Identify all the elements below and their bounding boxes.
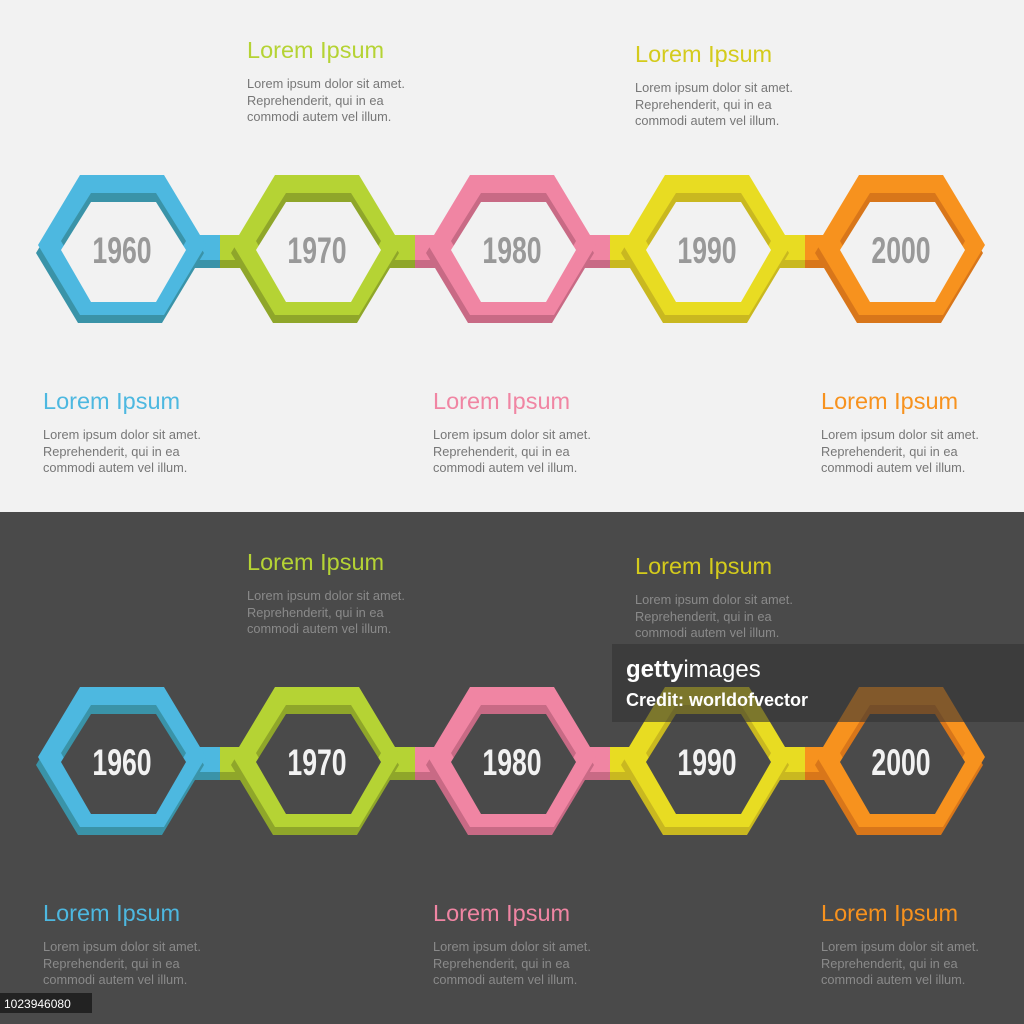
connectors [195, 235, 830, 268]
background: dark panel [0, 512, 1024, 1024]
image id label [0, 993, 92, 1013]
text block: 1970 top [247, 37, 405, 124]
text block: 1970 top dark: Lorem ipsum dolor sit amet. [247, 588, 405, 603]
text block: 1980 bottom [433, 388, 591, 475]
text block: 1960 bottom dark: Lorem Ipsum [43, 900, 180, 926]
hexagon 1960 dark [36, 687, 206, 835]
text block: 1990 top: commodi autem vel illum. [635, 113, 779, 128]
text block: 1980 bottom dark: Reprehenderit, qui in ea [433, 956, 570, 971]
text block: 1970 top dark: Reprehenderit, qui in ea [247, 605, 384, 620]
text block: 1990 top [635, 41, 793, 128]
text block: 1970 top dark: commodi autem vel illum. [247, 621, 391, 636]
hexagon 1980 dark [426, 687, 596, 835]
text block: 2000 bottom dark [821, 900, 979, 987]
text block: 1970 top dark [247, 549, 405, 636]
hexagon 1980 [426, 175, 596, 323]
text block: 1990 top: Lorem ipsum dolor sit amet. [635, 80, 793, 95]
hexagon 1970 dark: 1970 [287, 742, 347, 783]
hexagon 1980 dark: 1980 [482, 742, 542, 783]
timeline: dark [36, 687, 985, 835]
hexagon 1960: 1960 [92, 230, 152, 271]
text block: 1970 top: Lorem Ipsum [247, 37, 384, 63]
hexagon 1960 [36, 175, 206, 323]
text block: 1960 bottom: Reprehenderit, qui in ea [43, 444, 180, 459]
text block: 1960 bottom [43, 388, 201, 475]
text block: 1990 top dark: Lorem Ipsum [635, 553, 772, 579]
text block: 2000 bottom dark: Lorem ipsum dolor sit amet. [821, 939, 979, 954]
text block: 1970 top: Reprehenderit, qui in ea [247, 93, 384, 108]
text block: 1960 bottom dark: commodi autem vel illum. [43, 972, 187, 987]
hexagon 1990 dark: 1990 [677, 742, 737, 783]
hexagon 2000 dark: 2000 [871, 742, 931, 783]
text block: 2000 bottom: Reprehenderit, qui in ea [821, 444, 958, 459]
text block: 1980 bottom dark: Lorem ipsum dolor sit amet. [433, 939, 591, 954]
hexagon 2000 [815, 175, 985, 323]
text block: 1990 top dark [635, 553, 793, 640]
text block: 1960 bottom dark: Reprehenderit, qui in ea [43, 956, 180, 971]
text block: 1960 bottom: Lorem ipsum dolor sit amet. [43, 427, 201, 442]
text block: 2000 bottom dark: commodi autem vel illum. [821, 972, 965, 987]
text block: 2000 bottom: Lorem ipsum dolor sit amet. [821, 427, 979, 442]
text block: 1990 top dark: commodi autem vel illum. [635, 625, 779, 640]
hexagon 2000 dark [815, 687, 985, 835]
timeline: light [36, 175, 985, 323]
text block: 1970 top dark: Lorem Ipsum [247, 549, 384, 575]
text block: 1970 top: Lorem ipsum dolor sit amet. [247, 76, 405, 91]
text block: 1990 top dark: Lorem ipsum dolor sit amet. [635, 592, 793, 607]
text block: 1980 bottom: Lorem ipsum dolor sit amet. [433, 427, 591, 442]
text block: 2000 bottom dark: Reprehenderit, qui in ea [821, 956, 958, 971]
text block: 2000 bottom: Lorem Ipsum [821, 388, 958, 414]
text block: 1960 bottom: Lorem Ipsum [43, 388, 180, 414]
text block: 1960 bottom dark: Lorem ipsum dolor sit amet. [43, 939, 201, 954]
text block: 2000 bottom [821, 388, 979, 475]
watermark: gettyimages [626, 656, 761, 683]
hexagon 1980: 1980 [482, 230, 542, 271]
connectors dark [195, 747, 830, 780]
text block: 1980 bottom: Reprehenderit, qui in ea [433, 444, 570, 459]
text block: 1980 bottom: commodi autem vel illum. [433, 460, 577, 475]
hexagon 1990: 1990 [677, 230, 737, 271]
text block: 1980 bottom dark: commodi autem vel illum. [433, 972, 577, 987]
text block: 1960 bottom: commodi autem vel illum. [43, 460, 187, 475]
text block: 1970 top: commodi autem vel illum. [247, 109, 391, 124]
hexagon 1970 [231, 175, 401, 323]
image id label: 1023946080 [4, 997, 71, 1011]
text block: 1960 bottom dark [43, 900, 201, 987]
text block: 1990 top dark: Reprehenderit, qui in ea [635, 609, 772, 624]
hexagon 1960 dark: 1960 [92, 742, 152, 783]
text block: 1980 bottom dark: Lorem Ipsum [433, 900, 570, 926]
text block: 2000 bottom dark: Lorem Ipsum [821, 900, 958, 926]
text block: 2000 bottom: commodi autem vel illum. [821, 460, 965, 475]
hexagon 1970: 1970 [287, 230, 347, 271]
background: light panel [0, 0, 1024, 512]
text block: 1990 top: Lorem Ipsum [635, 41, 772, 67]
text block: 1980 bottom: Lorem Ipsum [433, 388, 570, 414]
watermark [612, 644, 1024, 722]
hexagon 2000: 2000 [871, 230, 931, 271]
hexagon 1990 dark [621, 687, 791, 835]
watermark: Credit: worldofvector [626, 690, 808, 710]
hexagon 1970 dark [231, 687, 401, 835]
text block: 1980 bottom dark [433, 900, 591, 987]
hexagon 1990 [621, 175, 791, 323]
text block: 1990 top: Reprehenderit, qui in ea [635, 97, 772, 112]
